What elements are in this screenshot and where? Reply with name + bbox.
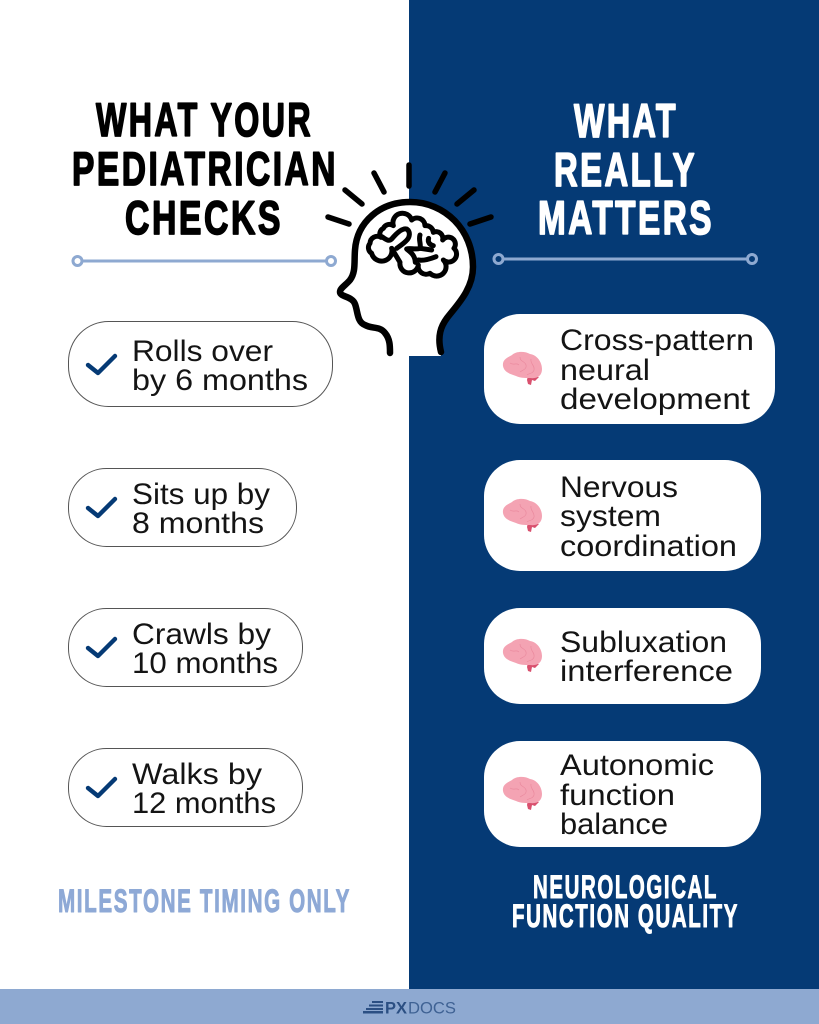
item text: function	[560, 779, 675, 812]
left heading connector line	[73, 256, 336, 266]
brain	[368, 213, 457, 276]
item text: interference	[560, 655, 733, 688]
icon: brain	[503, 499, 542, 532]
heading: what your pediatrician checks: CHECKS	[125, 191, 283, 244]
icon: check	[88, 639, 115, 656]
item text	[560, 471, 737, 563]
logo wordmark: PX	[385, 998, 408, 1018]
item text: Cross-pattern	[560, 324, 754, 357]
heading: what really matters: REALLY	[554, 143, 697, 196]
item text	[132, 758, 276, 820]
footer band	[0, 989, 819, 1024]
icon: head with brain and rays	[328, 165, 491, 356]
item text: 10 months	[132, 647, 278, 680]
item text	[132, 478, 270, 540]
head outline	[340, 202, 473, 353]
item text: 8 months	[132, 507, 264, 540]
item: cross-pattern	[484, 314, 775, 424]
item text	[560, 324, 754, 416]
item text: development	[560, 383, 751, 416]
item text	[560, 626, 733, 688]
item text: by 6 months	[132, 364, 308, 397]
item text	[560, 749, 714, 841]
heading: what your pediatrician checks	[72, 93, 338, 244]
panel: right list	[484, 314, 775, 847]
item: walks	[68, 748, 302, 826]
item text: Subluxation	[560, 626, 727, 659]
panel: right background	[409, 0, 819, 990]
logo: px docs	[363, 998, 456, 1018]
logo wordmark	[385, 998, 456, 1018]
panel: left background	[0, 0, 409, 990]
item text: neural	[560, 354, 650, 387]
icon: check	[88, 779, 115, 796]
item text: coordination	[560, 530, 737, 563]
item: sits up	[68, 468, 296, 546]
item text: 12 months	[132, 787, 276, 820]
item text: Walks by	[132, 758, 262, 791]
logo mark	[363, 1001, 383, 1014]
icon: brain	[503, 777, 542, 810]
icon: check	[88, 499, 115, 516]
item text: Sits up by	[132, 478, 270, 511]
item: autonomic	[484, 741, 761, 847]
item text: Nervous	[560, 471, 678, 504]
heading: what your pediatrician checks: WHAT YOUR	[96, 93, 313, 146]
icon: brain	[503, 639, 542, 672]
heading: what your pediatrician checks: PEDIATRICIAN	[72, 142, 338, 195]
item text: system	[560, 500, 661, 533]
item: nervous system	[484, 460, 761, 571]
rays	[328, 165, 491, 224]
head silhouette	[340, 202, 473, 356]
item text	[132, 335, 308, 397]
logo wordmark: DOCS	[408, 998, 456, 1018]
heading: what really matters: MATTERS	[538, 191, 714, 244]
caption: milestone timing only: MILESTONE TIMING ONLY	[58, 883, 351, 919]
heading: what really matters	[538, 94, 714, 244]
caption: neurological function quality: NEUROLOGICAL	[533, 869, 718, 905]
icon: brain	[503, 352, 542, 385]
caption: neurological function quality	[512, 869, 739, 934]
item: rolls over	[68, 322, 332, 406]
item: subluxation	[484, 608, 761, 704]
item: crawls	[68, 608, 302, 686]
right heading connector line	[494, 254, 756, 264]
icon: check	[88, 356, 115, 373]
item text: Crawls by	[132, 618, 271, 651]
panel: left checklist	[68, 322, 332, 826]
heading: what really matters: WHAT	[574, 94, 678, 147]
item text	[132, 618, 278, 680]
item text: balance	[560, 808, 668, 841]
item text: Rolls over	[132, 335, 273, 368]
item text: Autonomic	[560, 749, 714, 782]
